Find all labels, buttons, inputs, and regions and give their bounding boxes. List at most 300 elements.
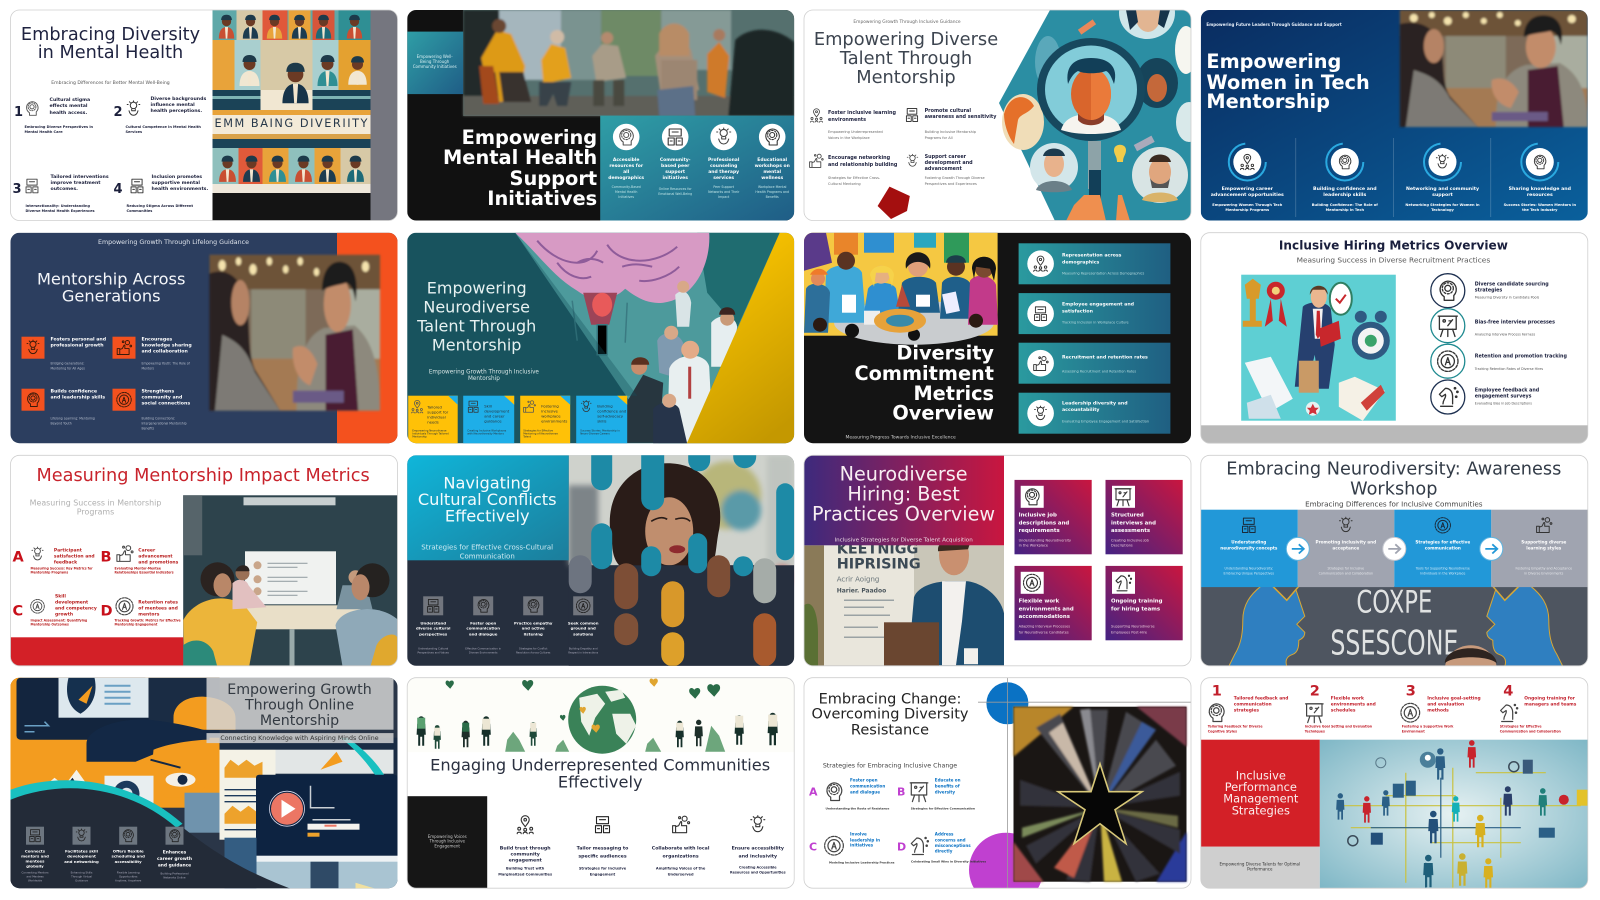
step: communication: Strategies for effective	[1415, 539, 1470, 544]
item: confidence: Building Confidence: The Role of	[1312, 203, 1378, 207]
item 1: Cultural stigma	[50, 97, 90, 103]
item: counseling: Professional	[708, 157, 740, 163]
item C: Mentorship Outcomes	[30, 622, 69, 626]
panel: Diversity Commitment Metrics Overview slide	[804, 233, 1191, 444]
item: personal growth: professional growth	[50, 343, 104, 349]
step: learning styles: Fostering Empathy and Acceptance	[1515, 566, 1572, 570]
title: Through Online	[244, 698, 354, 714]
image: colorful team illustration	[804, 233, 998, 345]
item: community: Building Connections:	[142, 417, 175, 421]
item: skill development: development	[484, 409, 510, 414]
subtitle: Strategies for Effective Cross-Cultural	[421, 543, 553, 551]
item: community: Benefits	[142, 427, 155, 431]
item 3: Fostering a Supportive Work	[1402, 725, 1454, 729]
item 2: 2	[114, 105, 123, 120]
callout: black tagline box: Engagement	[434, 844, 460, 849]
item: confidence	[22, 389, 105, 426]
item 2: schedules	[1331, 708, 1356, 714]
item: career development: Support career	[925, 154, 967, 160]
item: common ground: Seek common	[568, 620, 599, 625]
card: recruitment: Recruitment and retention rates	[1062, 355, 1148, 361]
item B	[100, 546, 179, 574]
image: cafe mentoring photo	[210, 255, 380, 411]
item: sharing knowledge: resources	[1527, 192, 1553, 198]
item 2: Inclusive Goal Setting and Evaluation	[1305, 725, 1373, 729]
item: knowledge sharing: Encourages	[142, 337, 172, 343]
item: peer support	[658, 124, 692, 196]
step: inclusivity: Promoting inclusivity and	[1316, 539, 1376, 544]
item 4: managers and teams	[1524, 702, 1577, 708]
item: accessible resources: Community-Based	[612, 185, 641, 189]
card: structured interviews: Creating Inclusive Job	[1111, 538, 1150, 542]
item: accessibility: Creating Accessible	[739, 866, 777, 870]
item: networking: Strategies for Effective Cross-	[828, 176, 881, 180]
title: Embracing Diversity	[21, 25, 200, 45]
card: structured interviews: interviews and	[1111, 520, 1156, 526]
item: flexible scheduling: Flexible Learning	[117, 871, 140, 875]
card: flexible work: environments and	[1019, 606, 1074, 612]
subtitle: Measuring Success in Mentorship	[30, 498, 161, 507]
step: understanding: neurodiversity concepts	[1220, 545, 1278, 550]
item: career growth: Networks Online	[163, 876, 186, 880]
panel: Empowering Mental Health Support Initiatives slide	[407, 10, 794, 221]
item: counseling: and therapy	[708, 169, 739, 175]
item: workshops: workshops on	[755, 163, 790, 169]
item: peer support: support	[665, 169, 686, 175]
item: knowledge sharing: Mentors	[142, 367, 154, 371]
item: trust: Marginalized Communities	[498, 873, 552, 877]
item: career advancement: Empowering Women Through Tech	[1212, 203, 1283, 207]
title: Women in Tech	[1206, 71, 1370, 94]
item: sharing knowledge	[1504, 144, 1576, 212]
item: confidence: and leadership skills	[50, 395, 105, 401]
item C: Skill	[55, 593, 66, 599]
item: tailored support: Individuals Through Tailored	[412, 432, 449, 436]
block: grey footer	[1201, 425, 1588, 443]
item: inclusive workplace	[520, 396, 570, 444]
item: messaging: specific audiences	[578, 854, 627, 860]
panel: Measuring Mentorship Impact Metrics slide	[10, 455, 398, 666]
panel: Inclusive Performance Management Strategies slide	[1201, 678, 1588, 889]
item: accessibility: and inclusivity	[739, 854, 777, 860]
item: connects mentors: mentees	[26, 859, 45, 864]
item: career growth: and guidance	[158, 863, 191, 869]
item: empathy: Practice empathy	[514, 620, 553, 625]
card: ongoing training	[1106, 566, 1183, 640]
item 2: environments and	[1331, 702, 1376, 708]
item: facilitates skills: development	[67, 854, 96, 859]
item: confidence: Beyond Youth	[50, 422, 72, 426]
item: empathy: and active	[522, 625, 545, 630]
card: leadership: accountability	[1062, 407, 1100, 413]
item: accessible resources: Initiatives	[618, 195, 634, 199]
item: career advancement: advancement opportunities	[1211, 192, 1284, 198]
item: tailored support	[408, 396, 458, 444]
item: accessible resources: demographics	[608, 175, 644, 181]
item: cultural awareness: Building Inclusive Mentorship	[925, 130, 977, 134]
subtitle: Connecting Knowledge with Aspiring Minds Online	[220, 735, 379, 742]
item 2	[1305, 684, 1376, 734]
item: personal growth: Fosters personal and	[50, 337, 106, 343]
item D: mentors	[138, 611, 160, 617]
item: sharing knowledge: Success Stories: Women Mentors in	[1504, 203, 1576, 207]
item 4: Strategies for Effective	[1500, 725, 1542, 729]
item 4: Reducing Stigma Across Different	[126, 204, 193, 208]
item C: growth	[55, 611, 73, 617]
item: empathy	[514, 596, 553, 654]
item: confidence: Mentorship in Tech	[1326, 208, 1364, 212]
item: communication: Diverse Environments	[469, 650, 498, 654]
item 4: 4	[114, 182, 123, 197]
item: common ground: solutions	[573, 631, 594, 636]
card: leadership	[1019, 393, 1170, 434]
title: Management	[1223, 792, 1299, 806]
item A: Measuring Success: Key Metrics for	[30, 566, 93, 570]
block: black base under image	[212, 193, 370, 221]
subtitle: Empowering Future Leaders Through Guidance and Support	[1206, 22, 1342, 27]
subtitle: Mentorship	[468, 376, 500, 382]
item: workshops: wellness	[761, 175, 783, 181]
title: Embracing Change:	[819, 692, 961, 708]
block: grey side bar	[370, 10, 398, 221]
item A	[12, 547, 95, 574]
panel: Empowering Growth Through Online Mentorship slide	[10, 678, 484, 890]
item D: Address	[935, 832, 954, 837]
item A: satisfaction and	[54, 553, 95, 559]
panel: Embracing Neurodiversity Awareness Workshop slide	[1201, 455, 1588, 693]
card: representation: Measuring Representation Across Demographics	[1062, 272, 1144, 276]
title: Talent Through	[839, 48, 972, 69]
image: online mentoring illustration	[10, 678, 484, 890]
item 2: Services	[126, 130, 142, 134]
item: messaging	[577, 817, 629, 877]
item 1: 1	[1212, 684, 1222, 700]
title: Mentorship	[856, 67, 956, 88]
item: sharing knowledge: Sharing knowledge and	[1509, 186, 1571, 192]
step: inclusivity	[1316, 517, 1376, 575]
shape: blue circle	[986, 682, 1028, 724]
text: sign lettering in photo: KEETNIGG	[837, 541, 918, 557]
item: candidate sourcing: Diverse candidate sourcing	[1475, 282, 1549, 288]
item 3: 3	[1406, 684, 1416, 700]
item 3: improve treatment	[50, 180, 101, 186]
card: representation: demographics	[1062, 260, 1100, 266]
item: tailored support: Empowering Neurodiverse	[412, 429, 447, 433]
item: feedback	[1431, 380, 1540, 414]
item: peer support: initiatives	[663, 175, 688, 181]
title: Resistance	[851, 723, 929, 739]
title: Empowering Diverse	[814, 29, 998, 50]
item: community: Intergenerational Mentorship	[142, 422, 187, 426]
item D: misconceptions	[935, 843, 971, 848]
item: flexible scheduling: Anytime, Anywhere	[115, 879, 142, 883]
item 1: Tailored feedback and	[1234, 696, 1288, 702]
item: peer support: Community-	[660, 157, 691, 163]
title: Mentorship Across	[37, 270, 185, 289]
panel: Embracing Change Overcoming Diversity Resistance slide	[804, 678, 1191, 900]
item: career advancement: Mentorship Programs	[1225, 208, 1269, 212]
item 2: Techniques	[1305, 730, 1325, 734]
item: flexible scheduling: scheduling and	[112, 854, 145, 859]
item: inclusive learning	[810, 109, 897, 140]
item: skill development: and career	[484, 414, 505, 419]
item: skill development: Skill	[484, 404, 492, 409]
item: flexible scheduling: Offers flexible	[113, 849, 144, 854]
subtitle: Measuring Progress Towards Inclusive Excellence	[845, 435, 956, 441]
arrow 3	[1480, 537, 1503, 560]
title: Metrics	[913, 382, 994, 405]
item: collaboration: Collaborate with local	[652, 846, 710, 852]
title: Support	[510, 167, 597, 190]
item: feedback: Employee feedback and	[1475, 388, 1540, 394]
card: ongoing training: for hiring teams	[1111, 606, 1160, 612]
item: career development: advancement	[925, 166, 962, 172]
title: Neurodiverse	[423, 298, 530, 317]
item 3	[1401, 684, 1481, 734]
item B: Educate on	[935, 778, 961, 783]
item: feedback: engagement surveys	[1475, 394, 1532, 400]
item: collaboration: Underserved	[668, 873, 694, 877]
item: skill development	[463, 396, 514, 444]
item: inclusive workplace: environments	[541, 419, 567, 424]
item: networking: Technology	[1431, 208, 1455, 212]
title: Performance	[1225, 780, 1297, 794]
item D: concerns and	[935, 838, 966, 843]
item: career advancement	[1211, 144, 1284, 212]
item 1: Cognitive Styles	[1208, 730, 1237, 734]
image: hands forming a star photo	[1014, 707, 1186, 882]
item: personal growth: Mentoring for All Ages	[50, 367, 85, 371]
item: connects mentors: Connecting Mentors	[21, 871, 49, 875]
item: personal growth	[22, 337, 106, 371]
item: inclusive learning: Foster inclusive learning	[828, 110, 897, 116]
item B	[897, 778, 975, 811]
item 3: Intersectionality: Understanding	[26, 204, 90, 208]
item: flexible scheduling: accessibility	[115, 859, 142, 864]
item: career advancement: Empowering career	[1222, 186, 1274, 192]
item: candidate sourcing: Measuring Diversity in Candidate Pools	[1475, 296, 1539, 300]
title: Hiring: Best	[847, 482, 960, 505]
item: feedback: Evaluating Bias in Job Descriptions	[1475, 402, 1532, 406]
item: inclusive workplace: workplace	[541, 414, 561, 419]
title: Diversity	[896, 342, 994, 365]
step: understanding: Embracing Unique Perspectives	[1224, 571, 1274, 575]
image: support group photo	[463, 10, 794, 116]
block: orange side bar	[337, 233, 398, 444]
item 1	[1208, 684, 1288, 734]
item 1: Embracing Diverse Perspectives in	[24, 125, 94, 129]
subtitle: Strategies for Embracing Inclusive Change	[823, 763, 957, 770]
card: job descriptions: requirements	[1019, 528, 1060, 534]
item 3: Diverse Mental Health Experiences	[26, 209, 95, 213]
item B: Relationships Essential Indicators	[114, 570, 174, 574]
item D: D	[897, 840, 906, 853]
item: accessibility: Ensure accessibility	[732, 846, 784, 852]
card: representation	[1019, 243, 1170, 284]
item: retention: Retention and promotion tracking	[1475, 354, 1567, 360]
item 1: effects mental	[50, 103, 88, 109]
item: retention: Tracking Retention Rates of Diverse Hires	[1474, 367, 1543, 371]
item: tailored support: Tailored	[426, 405, 442, 410]
item: workshops: Health Programs and	[755, 190, 789, 194]
card: ongoing training: Ongoing training	[1111, 598, 1163, 604]
card: recruitment: Assessing Recruitment and Retention Rates	[1062, 370, 1136, 374]
item: facilitates skills: and networking	[64, 859, 99, 864]
panel: teal initiative columns	[600, 116, 794, 221]
item 3: Inclusive goal-setting	[1427, 696, 1481, 702]
title: in Mental Health	[38, 43, 183, 63]
step: communication: Tools for Supporting Neurodiverse	[1415, 566, 1470, 570]
item 2: Cultural Competence in Mental Health	[126, 125, 201, 129]
item: confidence	[1312, 144, 1378, 212]
image: globe and community illustration	[407, 678, 794, 754]
title: Commitment	[854, 362, 994, 385]
item B: advancement	[138, 553, 173, 559]
item: connects mentors: mentors and	[21, 854, 49, 859]
item 2: influence mental	[150, 102, 195, 108]
card: job descriptions	[1014, 480, 1092, 554]
card: flexible work: Flexible work	[1019, 598, 1060, 604]
item D	[897, 832, 986, 864]
item: building confidence: Success Stories: Mentorship in	[580, 429, 620, 433]
image: portrait with pill mask	[568, 443, 794, 666]
item: inclusive learning: Voices in the Workplace	[828, 136, 870, 140]
panel: Empowering Neurodiverse Talent Through Mentorship slide	[407, 233, 794, 444]
step: inclusivity: Strategies for Inclusive	[1327, 566, 1364, 570]
title: Initiatives	[487, 187, 597, 210]
step: inclusivity: Communication and Collaboration	[1319, 571, 1373, 575]
item: building confidence	[576, 396, 627, 444]
item: inclusive learning: environments	[828, 117, 866, 123]
item: workshops: Benefits	[766, 195, 779, 199]
item B: Career	[138, 547, 156, 553]
item: facilitates skills: Enhancing Skills	[71, 871, 93, 875]
step: inclusivity: acceptance	[1332, 545, 1359, 550]
item C: C	[809, 840, 817, 853]
card: flexible work: for Neurodiverse Candidates	[1019, 630, 1069, 634]
item: peer support: based peer	[661, 163, 690, 169]
title: Mentorship	[260, 713, 339, 729]
item: accessibility: Resources and Opportunities	[730, 871, 786, 875]
item C: initiatives	[850, 843, 874, 848]
item 1: strategies	[1234, 708, 1259, 714]
title: Measuring Mentorship Impact Metrics	[36, 466, 370, 486]
title: Overview	[892, 402, 994, 425]
title: Practices Overview	[812, 502, 995, 525]
card: ongoing training: Employees Post-Hire	[1111, 630, 1147, 634]
item: inclusive learning: Empowering Underrepresented	[828, 130, 883, 134]
step: learning styles: in Diverse Environments	[1524, 571, 1564, 575]
title: Mentorship	[1206, 90, 1330, 113]
item: workshops	[755, 124, 790, 199]
item: flexible scheduling	[112, 827, 145, 883]
item: trust	[498, 816, 552, 877]
item: facilitates skills	[64, 827, 99, 883]
item: tailored support: needs	[427, 420, 439, 425]
item C: C	[12, 603, 23, 619]
item 4	[1500, 684, 1577, 734]
title: Empowering Growth	[227, 682, 372, 698]
item: inclusive workplace: inclusive	[541, 409, 558, 414]
item: messaging: Engagement	[590, 873, 616, 877]
item: counseling: services	[713, 175, 734, 181]
title: Empowering	[462, 126, 597, 149]
item: retention	[1431, 344, 1567, 378]
item 3: methods	[1427, 708, 1449, 714]
step: learning styles	[1515, 518, 1572, 575]
card: flexible work: Adapting Interview Processes	[1019, 624, 1070, 628]
title: Inclusive	[1236, 769, 1286, 783]
item: flexible scheduling: Opportunities	[119, 875, 138, 879]
item: facilitates skills: Guidance	[75, 879, 88, 883]
item: connects mentors: and Mentees	[26, 875, 44, 879]
card: representation: Representation across	[1062, 253, 1122, 259]
callout: teal tagline box: Empowering Well-	[417, 54, 453, 59]
item 1: 1	[14, 105, 23, 120]
item B: Evaluating Mentor-Mentee	[114, 566, 161, 570]
item: communication: Foster open	[470, 620, 496, 625]
item A: communication	[850, 784, 885, 789]
item 3: and evaluation	[1427, 702, 1464, 708]
item: workshops: mental	[763, 169, 781, 175]
item 4	[114, 174, 208, 213]
item: peer support: Online Resources for	[659, 187, 692, 191]
item B: benefits of	[935, 784, 960, 789]
arrow 2	[1383, 537, 1406, 560]
title: Cultural Conflicts	[418, 490, 557, 509]
item: cultural awareness: awareness and sensitivity	[925, 114, 997, 120]
item: cultural awareness: Promote cultural	[925, 108, 971, 114]
item: trust: engagement	[509, 858, 543, 864]
text: image banner lettering: EMM BAING DIVERIITY	[214, 117, 369, 130]
item: building confidence: Building	[597, 404, 613, 409]
card: structured interviews: Descriptions	[1111, 543, 1133, 547]
subtitle: Embracing Differences for Inclusive Communities	[1305, 499, 1483, 508]
item: knowledge sharing: Empowering Youth: The Role of	[142, 362, 191, 366]
block: title banner	[804, 455, 1004, 545]
item: career development: Perspectives and Experiences	[925, 182, 977, 186]
item: building confidence: confidence and	[597, 409, 627, 414]
item: common ground	[568, 596, 599, 654]
item A: Foster open	[850, 778, 878, 783]
item: accessible resources: all	[623, 169, 630, 175]
subtitle: Empowering Growth Through Lifelong Guidance	[98, 239, 249, 246]
item: cultural perspectives: Perspectives and Values	[418, 650, 450, 654]
card: structured interviews: Structured	[1111, 512, 1144, 518]
item: accessible resources	[608, 124, 644, 199]
item A: A	[809, 786, 818, 799]
title: Strategies	[1232, 804, 1290, 818]
card: recruitment	[1019, 343, 1170, 384]
item: empathy: Strategies for Conflict	[519, 646, 547, 650]
item: messaging: Tailor messaging to	[577, 846, 629, 852]
item 1: communication	[1234, 702, 1272, 708]
item 3	[12, 174, 109, 213]
item: tailored support: Mentorship	[412, 435, 427, 439]
card: leadership: Evaluating Employee Engagement and Satisfaction	[1062, 420, 1149, 424]
item 2	[114, 96, 206, 134]
item: career development: Fostering Growth Through Diverse	[925, 176, 985, 180]
image: meeting room photo	[183, 495, 398, 666]
title: Empowering	[427, 279, 527, 298]
callout: teal tagline box: Community Initiatives	[413, 64, 457, 69]
item A	[809, 778, 889, 811]
item B: B	[897, 786, 905, 799]
item: counseling: Networks and Their	[708, 190, 740, 194]
title: Embracing Neurodiversity: Awareness	[1226, 459, 1561, 479]
title: Inclusive Hiring Metrics Overview	[1279, 239, 1508, 253]
item: accessible resources: resources for	[609, 163, 644, 169]
